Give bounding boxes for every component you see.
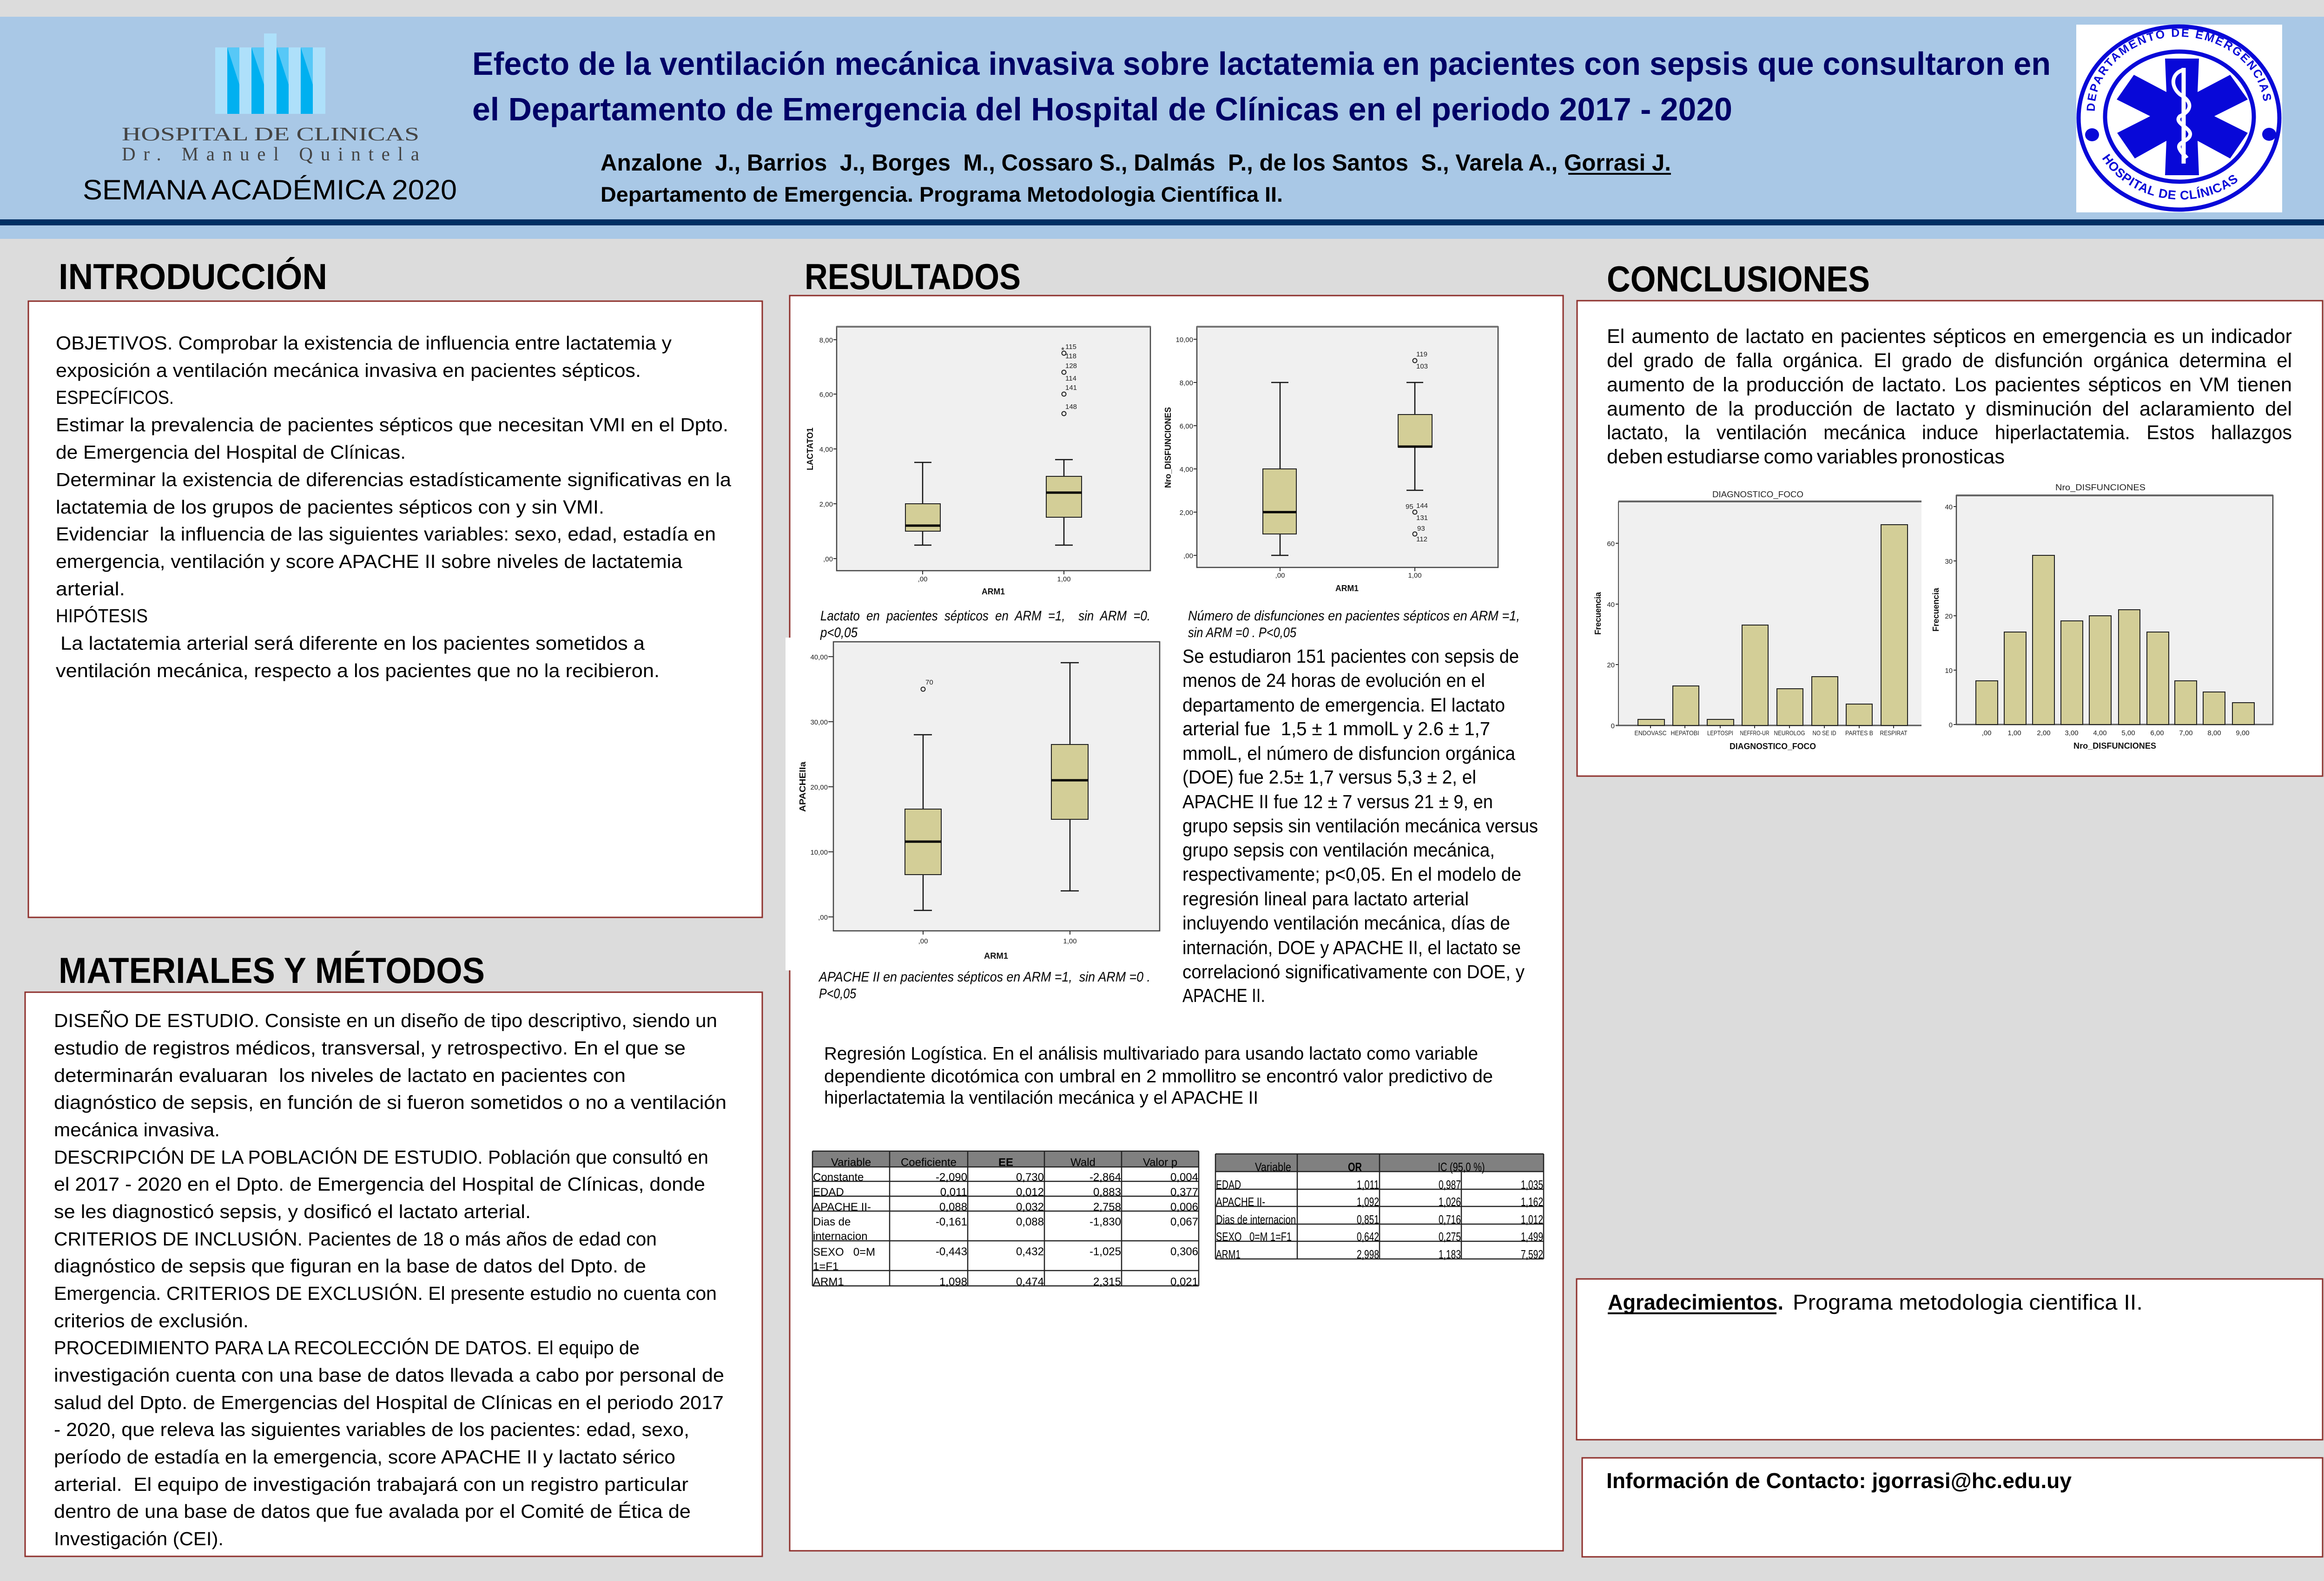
chart: lactato box plot: 118 [1065, 352, 1076, 360]
chart: disfunciones box plot: 10,00 [1175, 336, 1193, 344]
table: odds ratio [1215, 1154, 1544, 1261]
table: coeficientes de regresión: -2,864 [1089, 1171, 1121, 1184]
table: odds ratio: 1,183 [1439, 1247, 1461, 1261]
text block: regresión logística [824, 1044, 1493, 1108]
chart: disfunciones box plot: 131 [1416, 514, 1428, 522]
chart: diagnóstico foco bar chart [1593, 490, 1921, 751]
chart: número de disfunciones bar chart: 20 [1945, 613, 1953, 620]
table: coeficientes de regresión: -2,090 [936, 1171, 967, 1184]
chart: APACHE II box plot: 1,00 [1063, 937, 1077, 945]
text block: regresión logística: dependiente dicotómica con umbral en 2 mmollitro se encontró valor predictivo de [824, 1067, 1493, 1087]
table: coeficientes de regresión: 0,377 [1170, 1186, 1198, 1199]
chart: lactato box plot: 8,00 [819, 336, 833, 344]
chart: número de disfunciones bar chart: 9,00 [2236, 729, 2250, 737]
table: coeficientes de regresión: 0,006 [1170, 1201, 1198, 1213]
chart: disfunciones box plot: ARM1 [1335, 584, 1359, 593]
table: coeficientes de regresión: 0,088 [939, 1201, 967, 1213]
panel: materiales y métodos: período de estadía en la emergencia, score APACHE II y lactato sérico [54, 1446, 675, 1468]
text block: resultados: grupo sepsis con ventilación mecánica, [1182, 839, 1495, 861]
panel: introducción: exposición a ventilación mecánica invasiva en pacientes sépticos. [56, 360, 641, 381]
table: odds ratio: 1,012 [1521, 1212, 1543, 1226]
panel: información de contacto [1582, 1458, 2323, 1557]
chart: disfunciones box plot: 4,00 [1180, 466, 1193, 474]
table: odds ratio: 0,716 [1439, 1212, 1461, 1226]
table: coeficientes de regresión: internacion [813, 1230, 867, 1243]
table: coeficientes de regresión: -0,443 [936, 1245, 967, 1258]
chart: lactato box plot [805, 327, 1150, 596]
chart: diagnóstico foco bar chart: HEPATOBI [1670, 729, 1699, 737]
chart: lactato box plot: 128 [1065, 362, 1077, 370]
chart: número de disfunciones bar chart: 6,00 [2150, 729, 2164, 737]
text block: regresión logística: hiperlactatemia la ventilación mecánica y el APACHE II [824, 1088, 1258, 1108]
text block: resultados: correlacionó significativamente con DOE, y [1182, 961, 1525, 982]
poster title [472, 46, 2051, 127]
text block: resultados: internación, DOE y APACHE II, el lactato se [1182, 937, 1521, 958]
chart: diagnóstico foco bar chart: 60 [1607, 540, 1615, 548]
chart: lactato box plot: 4,00 [819, 446, 833, 454]
icon: emergency department emblem [2076, 25, 2282, 212]
chart: disfunciones box plot: Nro_DISFUNCIONES [1163, 407, 1173, 488]
chart: APACHE II box plot: 70 [925, 679, 933, 686]
panel: introducción: emergencia, ventilación y score APACHE II sobre niveles de lactatemia [56, 551, 682, 572]
chart: APACHE II box plot: ,00 [818, 914, 828, 922]
logo: Hospital de Clínicas [122, 33, 419, 165]
caption: lactato [820, 608, 1150, 640]
table: odds ratio: 1,162 [1521, 1195, 1543, 1209]
chart: diagnóstico foco bar chart: NO SE ID [1813, 729, 1836, 737]
chart: diagnóstico foco bar chart: NEUROLOG [1774, 729, 1805, 737]
text block: resultados: incluyendo ventilación mecánica, días de [1182, 912, 1510, 934]
chart: número de disfunciones bar chart: ,00 [1982, 729, 1991, 737]
table: odds ratio: 7,592 [1521, 1247, 1543, 1261]
panel: conclusiones [1577, 301, 2323, 776]
table: coeficientes de regresión: EDAD [813, 1186, 844, 1199]
table: odds ratio: Variable [1255, 1160, 1291, 1174]
text block: resultados: Se estudiaron 151 pacientes con sepsis de [1182, 646, 1519, 667]
table: odds ratio: 1,035 [1521, 1178, 1543, 1192]
table: coeficientes de regresión: Variable [831, 1156, 871, 1169]
panel: introducción: OBJETIVOS. Comprobar la existencia de influencia entre lactatemia y [56, 332, 672, 354]
panel: materiales y métodos: dentro de una base de datos que fue avalada por el Comité de Ética de [54, 1501, 691, 1522]
text block: resultados: grupo sepsis sin ventilación mecánica versus [1182, 815, 1538, 837]
table: coeficientes de regresión: 0,883 [1093, 1186, 1121, 1199]
chart: diagnóstico foco bar chart: PARTES B [1845, 729, 1873, 737]
affiliation: Departamento de Emergencia. Programa Metodologia Científica II. [601, 183, 1283, 206]
caption: disfunciones [1188, 608, 1520, 640]
text block: conclusiones: aumento de la producción de lactato y disminución del aclaramiento del [1607, 398, 2292, 420]
chart: número de disfunciones bar chart: 7,00 [2179, 729, 2193, 737]
panel: materiales y métodos: arterial. El equipo de investigación trabajará con un registro particular [54, 1474, 688, 1495]
chart: APACHE II box plot [798, 642, 1160, 961]
table: coeficientes de regresión: EE [998, 1156, 1013, 1169]
text block: resultados: mmolL, el número de disfuncion orgánica [1182, 743, 1515, 764]
panel: materiales y métodos: el 2017 - 2020 en el Dpto. de Emergencia del Hospital de Clínicas, donde [54, 1173, 705, 1195]
chart: número de disfunciones bar chart: Frecuencia [1931, 587, 1941, 632]
chart: número de disfunciones bar chart: 8,00 [2207, 729, 2221, 737]
chart: número de disfunciones bar chart: 10 [1945, 667, 1953, 675]
panel: introducción: ESPECÍFICOS. [56, 387, 174, 408]
chart: lactato box plot: ,00 [918, 575, 927, 583]
chart: diagnóstico foco bar chart: DIAGNOSTICO_FOCO [1712, 490, 1803, 500]
table: odds ratio: Dias de internacion [1216, 1212, 1296, 1226]
chart: lactato box plot: 114 [1065, 375, 1076, 382]
text block: conclusiones: lactato, la ventilación mecánica induce hiperlactatemia. Estos hallazgos [1607, 422, 2292, 444]
panel: materiales y métodos: criterios de exclusión. [54, 1310, 249, 1331]
panel: introducción: ventilación mecánica, respecto a los pacientes que no la recibieron. [56, 660, 660, 681]
table: odds ratio: 1,026 [1439, 1195, 1461, 1209]
table: odds ratio: 0,987 [1439, 1178, 1461, 1192]
chart: APACHE II box plot: APACHEIIa [798, 761, 807, 812]
chart: disfunciones box plot: 8,00 [1180, 379, 1193, 387]
text block: resultados: regresión lineal para lactato arterial [1182, 888, 1469, 909]
chart: número de disfunciones bar chart: 40 [1945, 503, 1953, 511]
table: coeficientes de regresión: -0,161 [936, 1216, 967, 1228]
panel: información de contacto: Información de Contacto: jgorrasi@hc.edu.uy [1606, 1469, 2072, 1493]
panel: materiales y métodos [25, 992, 762, 1556]
panel: introducción: de Emergencia del Hospital de Clínicas. [56, 441, 406, 463]
chart: diagnóstico foco bar chart: ENDOVASC [1634, 729, 1667, 737]
caption: disfunciones: sin ARM =0 . P<0,05 [1188, 625, 1296, 640]
table: coeficientes de regresión: 1=F1 [813, 1260, 838, 1273]
chart: lactato box plot: ARM1 [982, 587, 1005, 596]
chart: disfunciones box plot: 6,00 [1180, 422, 1193, 430]
caption: APACHE II: P<0,05 [819, 986, 856, 1001]
panel: materiales y métodos: PROCEDIMIENTO PARA LA RECOLECCIÓN DE DATOS. El equipo de [54, 1337, 640, 1358]
panel: materiales y métodos: Emergencia. CRITERIOS DE EXCLUSIÓN. El presente estudio no cuenta con [54, 1283, 717, 1304]
chart: APACHE II box plot: ,00 [918, 937, 928, 945]
header banner [0, 17, 2324, 239]
chart: diagnóstico foco bar chart: RESPIRAT [1880, 729, 1908, 737]
panel: materiales y métodos: diagnóstico de sepsis, en función de si fueron sometidos o no a ventilación [54, 1092, 726, 1113]
table: coeficientes de regresión: 0,474 [1016, 1276, 1044, 1288]
panel: materiales y métodos: diagnóstico de sepsis que figuran en la base de datos del Dpto. de [54, 1255, 646, 1277]
chart: número de disfunciones bar chart: 3,00 [2065, 729, 2079, 737]
panel: introducción: Evidenciar la influencia de las siguientes variables: sexo, edad, estadía en [56, 523, 716, 545]
chart: disfunciones box plot: 103 [1416, 362, 1428, 370]
chart: disfunciones box plot: 144 [1416, 502, 1428, 510]
chart: APACHE II box plot: 40,00 [810, 653, 828, 661]
table: coeficientes de regresión: 0,730 [1016, 1171, 1044, 1184]
chart: lactato box plot: 115 [1065, 343, 1076, 351]
table: coeficientes de regresión: -1,025 [1089, 1245, 1121, 1258]
chart: diagnóstico foco bar chart: DIAGNOSTICO_FOCO [1730, 742, 1816, 751]
chart: número de disfunciones bar chart: 4,00 [2093, 729, 2107, 737]
table: coeficientes de regresión: Coeficiente [901, 1156, 957, 1169]
chart: disfunciones box plot [1163, 327, 1498, 593]
chart: disfunciones box plot: 95 [1406, 503, 1413, 511]
chart: número de disfunciones bar chart: 30 [1945, 558, 1953, 566]
table: odds ratio: APACHE II- [1216, 1195, 1265, 1209]
chart: diagnóstico foco bar chart: LEPTOSPI [1707, 729, 1733, 737]
text block: resultados: arterial fue 1,5 ± 1 mmolL y 2.6 ± 1,7 [1182, 718, 1490, 739]
heading: materiales y métodos: MATERIALES Y MÉTODOS [59, 950, 485, 991]
text block: regresión logística: Regresión Logística. En el análisis multivariado para usando lactato como variable [824, 1044, 1478, 1064]
table: odds ratio: 2,998 [1357, 1247, 1379, 1261]
panel: agradecimientos: Agradecimientos. [1608, 1290, 1783, 1314]
poster title: Efecto de la ventilación mecánica invasiva sobre lactatemia en pacientes con sepsis que consultaron en [472, 46, 2051, 82]
chart: disfunciones box plot: 112 [1416, 535, 1427, 543]
chart: disfunciones box plot: ,00 [1183, 552, 1193, 560]
caption: lactato: p<0,05 [820, 625, 858, 640]
text block: resultados: departamento de emergencia. El lactato [1182, 694, 1505, 716]
chart: diagnóstico foco bar chart: 20 [1607, 661, 1615, 669]
panel: materiales y métodos: investigación cuenta con una base de datos llevada a cabo por personal de [54, 1364, 724, 1386]
chart: lactato box plot: 141 [1065, 384, 1077, 392]
event label: SEMANA ACADÉMICA 2020 [83, 174, 457, 205]
panel: materiales y métodos: DESCRIPCIÓN DE LA POBLACIÓN DE ESTUDIO. Población que consultó en [54, 1146, 708, 1168]
table: coeficientes de regresión: 2,758 [1093, 1201, 1121, 1213]
heading: resultados: RESULTADOS [805, 256, 1021, 297]
chart: número de disfunciones bar chart: 5,00 [2121, 729, 2135, 737]
icon: emergency department emblem: HOSPITAL DE CLÍNICAS [2100, 152, 2241, 203]
chart: diagnóstico foco bar chart: 0 [1611, 722, 1615, 730]
table: coeficientes de regresión: Valor p [1143, 1156, 1177, 1169]
chart: lactato box plot: * [1061, 346, 1064, 355]
table: coeficientes de regresión: Wald [1070, 1156, 1096, 1169]
panel: materiales y métodos: - 2020, que releva las siguientes variables de los pacientes: edad, sexo, [54, 1419, 689, 1440]
chart: número de disfunciones bar chart: Nro_DISFUNCIONES [2073, 741, 2156, 751]
caption: disfunciones: Número de disfunciones en pacientes sépticos en ARM =1, [1188, 608, 1520, 624]
table: odds ratio: 0,642 [1357, 1230, 1379, 1244]
table: coeficientes de regresión [812, 1151, 1199, 1288]
text block: resultados: respectivamente; p<0,05. En el modelo de [1182, 863, 1521, 885]
panel: materiales y métodos: se les diagnosticó sepsis, y dosificó el lactato arterial. [54, 1201, 531, 1222]
panel: introducción: Estimar la prevalencia de pacientes sépticos que necesitan VMI en el Dpto. [56, 414, 728, 435]
panel: materiales y métodos: Investigación (CEI). [54, 1528, 224, 1549]
text block: conclusiones: del grado de falla orgánica. El grado de disfunción orgánica determina el [1607, 349, 2292, 372]
chart: APACHE II box plot: 10,00 [810, 849, 828, 856]
panel: materiales y métodos: DISEÑO DE ESTUDIO. Consiste en un diseño de tipo descriptivo, siendo un [54, 1010, 717, 1031]
chart: disfunciones box plot: ,00 [1275, 572, 1285, 580]
panel: introducción: HIPÓTESIS [56, 605, 148, 626]
chart: lactato box plot: 148 [1065, 403, 1077, 411]
logo: Hospital de Clínicas: Dr. Manuel Quintela [122, 143, 419, 165]
panel: introducción: Determinar la existencia de diferencias estadísticamente significativas en la [56, 469, 731, 490]
text block: resultados: APACHE II. [1182, 985, 1265, 1006]
panel: materiales y métodos: CRITERIOS DE INCLUSIÓN. Pacientes de 18 o más años de edad con [54, 1228, 657, 1250]
table: odds ratio: ARM1 [1216, 1247, 1241, 1261]
chart: número de disfunciones bar chart [1931, 483, 2273, 751]
panel: resultados [786, 296, 1563, 1551]
chart: diagnóstico foco bar chart: 40 [1607, 601, 1615, 609]
chart: número de disfunciones bar chart: 1,00 [2007, 729, 2021, 737]
chart: disfunciones box plot: 93 [1417, 525, 1425, 533]
panel: agradecimientos [1577, 1279, 2323, 1440]
table: odds ratio: OR [1348, 1160, 1362, 1174]
table: odds ratio: 1,499 [1521, 1230, 1543, 1244]
text block: resultados: menos de 24 horas de evolución en el [1182, 670, 1485, 691]
chart: disfunciones box plot: 1,00 [1408, 572, 1422, 580]
table: odds ratio: IC (95,0 %) [1438, 1160, 1485, 1174]
panel: agradecimientos: Programa metodologia cientifica II. [1793, 1290, 2143, 1314]
chart: lactato box plot: ,00 [823, 555, 833, 563]
caption: APACHE II [818, 969, 1150, 1001]
heading: introducción: INTRODUCCIÓN [59, 256, 327, 297]
table: odds ratio: 1,011 [1357, 1178, 1379, 1192]
table: coeficientes de regresión: Constante [813, 1171, 864, 1184]
chart: diagnóstico foco bar chart: NEFFRO-UR [1740, 729, 1769, 737]
table: coeficientes de regresión: 0,011 [940, 1186, 967, 1199]
table: coeficientes de regresión: 0,021 [1170, 1276, 1198, 1288]
table: odds ratio: EDAD [1216, 1178, 1241, 1192]
chart: APACHE II box plot: 20,00 [810, 784, 828, 791]
caption: APACHE II: APACHE II en pacientes sépticos en ARM =1, sin ARM =0 . [818, 969, 1150, 985]
table: coeficientes de regresión: 0,004 [1170, 1171, 1198, 1184]
text block: resultados: APACHE II fue 12 ± 7 versus 21 ± 9, en [1182, 791, 1493, 812]
text block: conclusiones: deben estudiarse como variables pronosticas [1607, 446, 2005, 468]
chart: disfunciones box plot: 119 [1416, 350, 1427, 358]
chart: APACHE II box plot: ARM1 [984, 951, 1008, 961]
caption: lactato: Lactato en pacientes sépticos en ARM =1, sin ARM =0. [820, 608, 1150, 624]
text block: resultados [1182, 646, 1538, 1006]
table: coeficientes de regresión: 0,012 [1016, 1186, 1044, 1199]
table: coeficientes de regresión: 0,432 [1016, 1245, 1044, 1258]
table: coeficientes de regresión: 2,315 [1093, 1276, 1121, 1288]
table: coeficientes de regresión: 0,032 [1016, 1201, 1044, 1213]
panel: introducción: lactatemia de los grupos de pacientes sépticos con y sin VMI. [56, 496, 604, 518]
table: coeficientes de regresión: 0,067 [1170, 1216, 1198, 1228]
table: odds ratio: SEXO 0=M 1=F1 [1216, 1230, 1292, 1244]
chart: número de disfunciones bar chart: 0 [1949, 721, 1953, 729]
chart: lactato box plot: 2,00 [819, 501, 833, 508]
panel: materiales y métodos: determinarán evaluaran los niveles de lactato en pacientes con [54, 1065, 626, 1086]
panel: introducción: arterial. [56, 578, 125, 599]
text block: resultados: (DOE) fue 2.5± 1,7 versus 5,3 ± 2, el [1182, 766, 1476, 788]
authors: Anzalone J., Barrios J., Borges M., Cossaro S., Dalmás P., de los Santos S., Varela A., Gorrasi J. [601, 150, 1671, 176]
icon: emergency department emblem: DEPARTAMENTO DE EMERGENCIAS [2085, 26, 2274, 112]
panel: materiales y métodos: mecánica invasiva. [54, 1119, 220, 1140]
table: coeficientes de regresión: ARM1 [813, 1276, 844, 1288]
poster title: el Departamento de Emergencia del Hospital de Clínicas en el periodo 2017 - 2020 [472, 91, 1732, 127]
chart: número de disfunciones bar chart: Nro_DISFUNCIONES [2055, 483, 2146, 493]
text block: conclusiones: aumento de la producción de lactato. Los pacientes sépticos en VM tienen [1607, 374, 2292, 396]
table: coeficientes de regresión: 0,088 [1016, 1216, 1044, 1228]
panel: materiales y métodos: estudio de registros médicos, transversal, y retrospectivo. En el que se [54, 1037, 686, 1059]
table: coeficientes de regresión: 1,098 [939, 1276, 967, 1288]
table: coeficientes de regresión: 0,306 [1170, 1245, 1198, 1258]
chart: lactato box plot: 6,00 [819, 391, 833, 399]
chart: número de disfunciones bar chart: 2,00 [2037, 729, 2051, 737]
chart: lactato box plot: 1,00 [1057, 575, 1071, 583]
panel: introducción: La lactatemia arterial será diferente en los pacientes sometidos a [60, 632, 645, 654]
table: odds ratio: 0,851 [1357, 1212, 1379, 1226]
panel: materiales y métodos: salud del Dpto. de Emergencias del Hospital de Clínicas en el periodo 2017 [54, 1392, 724, 1413]
text block: conclusiones [1607, 325, 2292, 468]
table: coeficientes de regresión: Dias de [813, 1216, 851, 1228]
chart: lactato box plot: LACTATO1 [805, 428, 815, 470]
heading: conclusiones: CONCLUSIONES [1607, 258, 1870, 299]
table: coeficientes de regresión: APACHE II- [813, 1201, 871, 1213]
chart: APACHE II box plot: 30,00 [810, 718, 828, 726]
table: coeficientes de regresión: SEXO 0=M [813, 1246, 875, 1258]
table: odds ratio: 1,092 [1357, 1195, 1379, 1209]
panel: introducción [28, 301, 762, 917]
text block: conclusiones: El aumento de lactato en pacientes sépticos en emergencia es un indicador [1607, 325, 2292, 348]
logo: Hospital de Clínicas: HOSPITAL DE CLINICAS [122, 123, 419, 145]
table: coeficientes de regresión: -1,830 [1089, 1216, 1121, 1228]
chart: disfunciones box plot: 2,00 [1180, 509, 1193, 517]
table: odds ratio: 0,275 [1439, 1230, 1461, 1244]
chart: diagnóstico foco bar chart: Frecuencia [1593, 592, 1603, 635]
